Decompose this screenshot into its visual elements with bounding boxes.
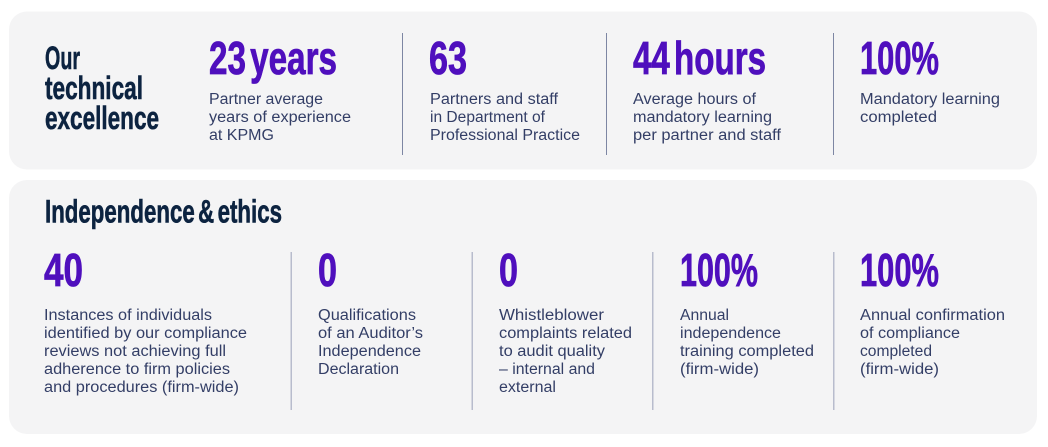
stat: 0 whistleblower complaints: – internal and: [499, 361, 595, 378]
stat: 44 hours: per partner and staff: [633, 127, 782, 144]
stat: 100% mandatory learning: 100%: [860, 32, 939, 84]
stat: 63: in Department of: [430, 109, 546, 126]
stat: 0 whistleblower complaints: 0: [499, 244, 518, 296]
stat: 100% independence training: 100%: [680, 244, 758, 296]
stat: 100% annual confirmation: completed: [860, 343, 932, 360]
stat: 100% mandatory learning: completed: [860, 109, 937, 126]
stat: 100% mandatory learning: [860, 32, 1000, 126]
heading: our technical excellence: [45, 40, 159, 136]
stat: 23 years: Partner average: [209, 91, 323, 108]
stat: 100% annual confirmation: 100%: [860, 244, 939, 296]
stat: 44 hours: 44 hours: [633, 32, 766, 84]
stat: 100% annual confirmation: (firm-wide): [860, 361, 939, 378]
stat: 40: and procedures (firm-wide): [44, 379, 239, 396]
stat: 100% mandatory learning: Mandatory learning: [860, 91, 1000, 108]
stat: 0 qualifications: Independence: [318, 343, 421, 360]
stat: 40: reviews not achieving full: [44, 343, 226, 360]
stat: 100% independence training: training completed: [680, 343, 814, 360]
stat: 0 qualifications: Declaration: [318, 361, 399, 378]
stat: 100% independence training: [680, 244, 814, 378]
stat: 100% annual confirmation: [860, 244, 1005, 378]
stat: 0 whistleblower complaints: to audit quality: [499, 343, 605, 360]
heading: independence and ethics: Independence & ethics: [45, 194, 282, 230]
stat: 23 years: [209, 32, 351, 144]
stat: 40: adherence to firm policies: [44, 361, 230, 378]
stat: 44 hours: Average hours of: [633, 91, 757, 108]
stat: 100% independence training: Annual: [680, 307, 729, 324]
heading: our technical excellence: technical: [45, 70, 143, 106]
stat: 100% independence training: independence: [680, 325, 781, 342]
stat: 44 hours: mandatory learning: [633, 109, 772, 126]
stat: 0 qualifications: of an Auditor’s: [318, 325, 423, 342]
stat: 0 whistleblower complaints: Whistleblower: [499, 307, 604, 324]
stat: 23 years: years of experience: [209, 109, 351, 126]
stat: 40: 40: [44, 244, 83, 296]
stat: 63: [429, 32, 580, 144]
stat: 0 qualifications: Qualifications: [318, 307, 416, 324]
stat: 100% annual confirmation: Annual confirmation: [860, 307, 1005, 324]
stat: 63: Professional Practice: [430, 127, 580, 144]
stat: 23 years: 23 years: [209, 32, 337, 84]
stat: 0 whistleblower complaints: [499, 244, 632, 396]
stat: 63: Partners and staff: [430, 91, 559, 108]
stat: 100% independence training: (firm-wide): [680, 361, 759, 378]
panel: independence and ethics: [9, 180, 1037, 434]
stat: 0 whistleblower complaints: complaints related: [499, 325, 632, 342]
stat: 100% annual confirmation: of compliance: [860, 325, 960, 342]
stat: 0 whistleblower complaints: external: [499, 379, 556, 396]
stat: 44 hours: [633, 32, 782, 144]
heading: our technical excellence: Our: [45, 40, 80, 76]
stat: 0 qualifications: [318, 244, 423, 378]
stat: 0 qualifications: 0: [318, 244, 337, 296]
stat: 40: [44, 244, 247, 396]
stat: 23 years: at KPMG: [209, 127, 274, 144]
stat: 40: Instances of individuals: [44, 307, 212, 324]
heading: our technical excellence: excellence: [45, 100, 159, 136]
stat: 40: identified by our compliance: [44, 325, 247, 342]
panel: technical excellence: [9, 12, 1037, 170]
stat: 63: 63: [429, 32, 467, 84]
